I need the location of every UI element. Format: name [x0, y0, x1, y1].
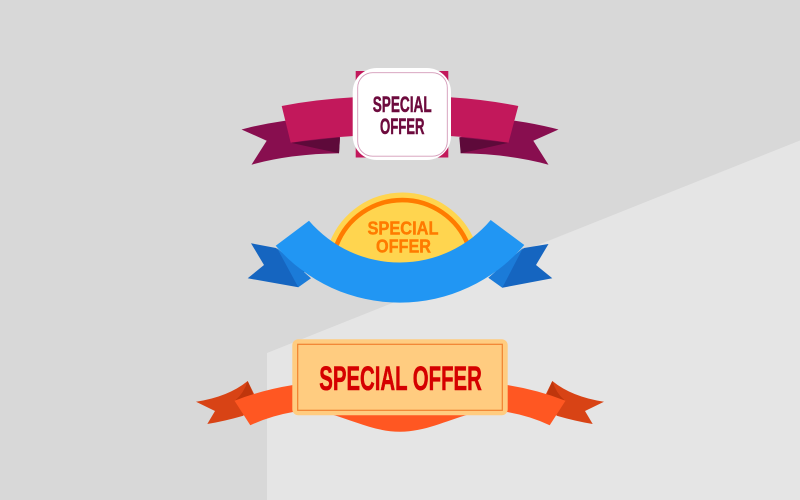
badge inner outline [358, 73, 447, 156]
badge orange ring [337, 200, 468, 245]
blue ribbon band [276, 220, 524, 303]
right ribbon tail [460, 121, 558, 165]
left ribbon tail [242, 121, 340, 165]
right ribbon tail [545, 381, 604, 424]
badge text: OFFER [376, 236, 431, 257]
badge text [368, 217, 438, 257]
banner: orange ribbon with rectangular badge [196, 339, 604, 432]
badge text: OFFER [380, 114, 425, 139]
left fold shadow [291, 137, 340, 153]
round badge [330, 192, 475, 265]
badge text: SPECIAL [373, 92, 432, 117]
left ribbon tail [248, 243, 305, 287]
right ribbon front [450, 97, 518, 143]
right fold shadow [459, 137, 508, 153]
rectangular badge [292, 339, 508, 415]
square badge [353, 68, 451, 160]
badge inner outline [298, 344, 502, 410]
badge text: SPECIAL [368, 217, 438, 238]
left ribbon tail [196, 381, 255, 424]
badge text [373, 92, 432, 139]
left fold shadow [235, 381, 254, 401]
square badge corners [356, 71, 448, 158]
banner: magenta ribbon with square badge [242, 68, 558, 165]
right fold shadow [546, 381, 565, 401]
right fold [488, 248, 523, 288]
left ribbon front [282, 97, 354, 143]
right ribbon tail [495, 244, 552, 288]
badge text: SPECIAL OFFER [319, 360, 482, 398]
left ribbon front [234, 385, 293, 425]
bottom swoosh [330, 414, 470, 432]
right ribbon front [507, 385, 566, 425]
left fold [277, 248, 311, 287]
banner: blue ribbon with round badge [248, 192, 552, 303]
